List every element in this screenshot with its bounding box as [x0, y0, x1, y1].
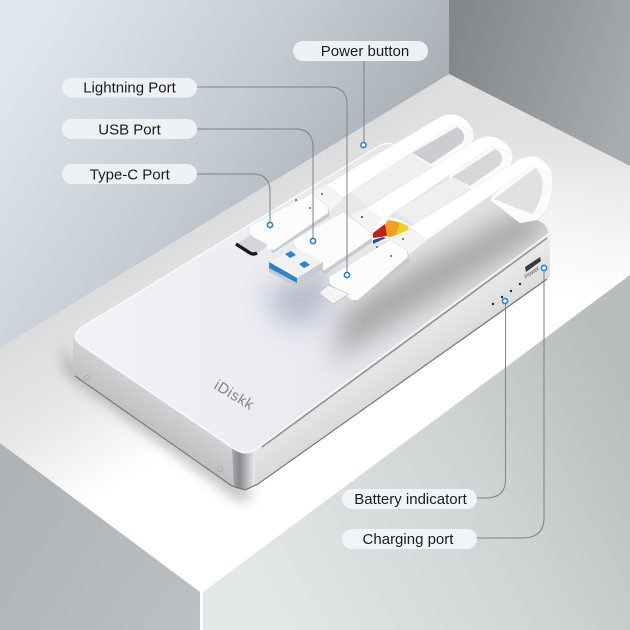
USB plug [269, 248, 323, 287]
cable 3: Lightning [319, 156, 553, 304]
upper strip [366, 136, 513, 221]
loop opening [494, 168, 543, 214]
label: Type-C Port [62, 164, 197, 184]
rainbow window [372, 217, 413, 244]
USB-C plug [236, 235, 268, 256]
body [248, 193, 328, 250]
label: Power button [293, 41, 428, 61]
lower strip [396, 177, 471, 224]
body shade [249, 208, 330, 253]
collar [312, 184, 343, 213]
leader lines [197, 60, 544, 538]
bevel dark line [262, 238, 547, 447]
upper strip [326, 114, 474, 198]
body shade [330, 252, 410, 304]
label: USB Port [62, 119, 197, 139]
label: Lightning Port: Lightning Port [83, 80, 177, 96]
background: left wall [0, 0, 450, 350]
background: right wall [449, 0, 630, 170]
cable 1: Type-C [236, 114, 474, 256]
port caption: Power [524, 265, 542, 281]
table right face [203, 275, 630, 630]
power bank [60, 144, 550, 502]
left side face [73, 336, 242, 490]
front corner [232, 449, 255, 490]
cable shadows [262, 205, 548, 362]
upper strip [408, 156, 553, 242]
table top right highlight [400, 74, 630, 370]
body shade [293, 234, 374, 274]
loop opening [412, 127, 464, 164]
body [329, 240, 408, 300]
drop shadow [60, 345, 255, 502]
loop [448, 136, 513, 191]
loop opening [452, 149, 502, 186]
label: Type-C Port: Type-C Port [90, 166, 171, 184]
body [293, 212, 372, 270]
table left face [0, 443, 200, 630]
loop [490, 157, 553, 223]
side icons [84, 376, 222, 472]
bottom white edge [258, 282, 548, 487]
lower strip [345, 153, 432, 206]
label: USB Port: USB Port [98, 122, 162, 138]
label: Charging port [342, 529, 477, 549]
collar [388, 229, 427, 256]
right side face [236, 230, 550, 490]
loop [408, 114, 474, 169]
label: Power button: Power button [321, 43, 409, 60]
collar [350, 207, 383, 238]
logo: iDiskk [211, 377, 257, 414]
charging port [525, 257, 541, 272]
Lightning plug [319, 285, 349, 304]
label: Lightning Port [62, 78, 197, 98]
callout markers [267, 142, 547, 304]
top surface [75, 144, 548, 453]
cable 2: USB [269, 136, 513, 287]
label: Charging port: Charging port [363, 531, 454, 548]
LED indicators [492, 283, 521, 305]
bottom edge lines [75, 279, 547, 490]
label: Battery indicatort: Battery indicatort [354, 491, 468, 508]
